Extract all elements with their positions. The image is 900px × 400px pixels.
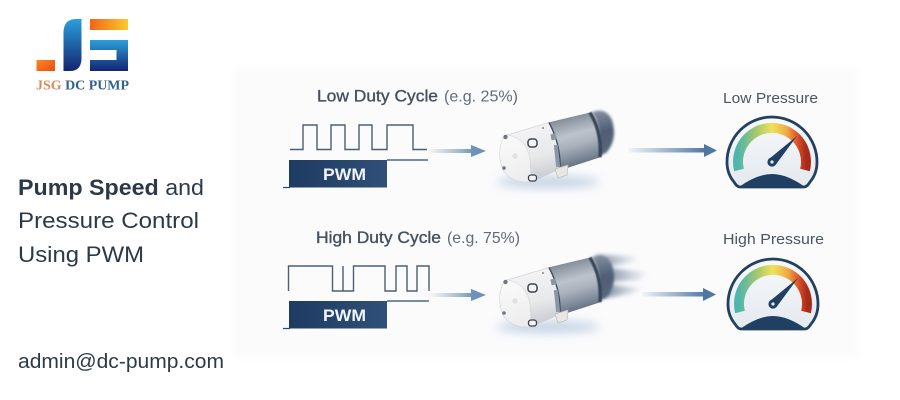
- row: high duty cycle: [283, 229, 824, 333]
- contact email: admin@dc-pump.com: [18, 351, 224, 373]
- title: Pump Speed and: [18, 175, 204, 200]
- PWM label: [283, 160, 428, 188]
- logo: S mark: [90, 19, 128, 71]
- logo wordmark: JSG DC PUMP: [36, 78, 129, 92]
- logo: J mark: [36, 19, 82, 71]
- heading: high duty cycle: [316, 229, 520, 247]
- arrow to motor: [428, 145, 486, 157]
- PWM label: PWM: [323, 307, 366, 325]
- PWM label: PWM: [323, 166, 366, 184]
- heading: low duty cycle: (e.g. 25%): [444, 88, 518, 106]
- heading: low duty cycle: [317, 88, 518, 106]
- arrow to gauge: [642, 288, 716, 301]
- label: high pressure: High Pressure: [723, 232, 824, 248]
- PWM waveform: [290, 125, 427, 150]
- motor with slight blur: [496, 111, 614, 188]
- PWM label: [283, 301, 429, 328]
- PWM waveform: [288, 266, 429, 291]
- heading: high duty cycle: (e.g. 75%): [447, 230, 520, 247]
- background panel: [233, 69, 858, 358]
- arrow to gauge: [628, 144, 717, 157]
- arrow to motor: [430, 289, 486, 301]
- motor with motion blur: [496, 255, 650, 333]
- title: Pressure Control: [18, 208, 199, 233]
- gauge: high pressure: [728, 259, 818, 329]
- heading: high duty cycle: High Duty Cycle: [316, 229, 441, 247]
- heading: low duty cycle: Low Duty Cycle: [317, 88, 438, 106]
- title: [18, 175, 204, 267]
- label: low pressure: Low Pressure: [723, 91, 818, 107]
- gauge: low pressure: [727, 117, 817, 187]
- row: low duty cycle: [283, 88, 818, 188]
- logo: [36, 19, 129, 92]
- title: Using PWM: [18, 242, 144, 267]
